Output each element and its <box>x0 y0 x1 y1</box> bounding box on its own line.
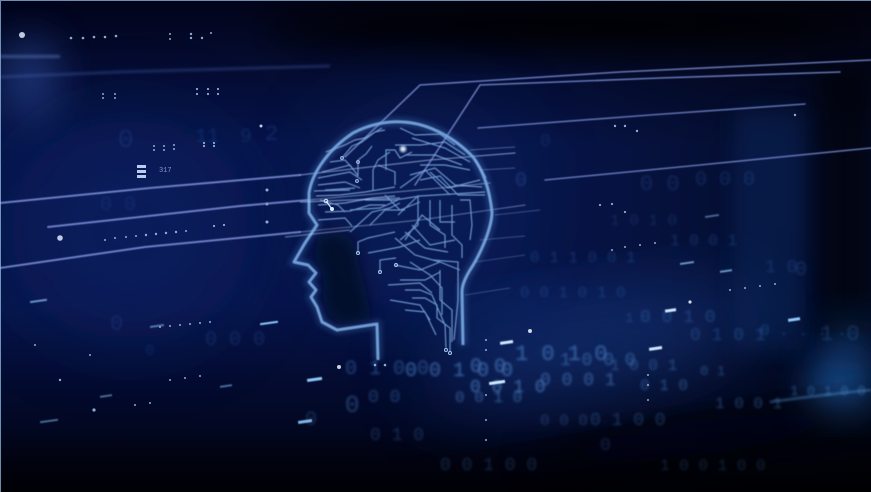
blurred binary digits: 0 <box>515 170 527 193</box>
blurred binary digits: 1 0 <box>820 322 860 347</box>
binary digit cluster: 1 0 1 0 <box>515 342 607 367</box>
binary digit cluster: 0 1 0 <box>640 377 688 395</box>
binary digit cluster: 1 0 0 0 <box>560 351 636 371</box>
small data label with bars: 317 <box>159 167 172 175</box>
binary digit cluster: 0 0 <box>368 388 400 408</box>
blurred binary digits: 0 <box>118 125 134 155</box>
binary digit cluster <box>305 342 866 476</box>
binary digit cluster: 1 0 0 1 <box>715 395 782 413</box>
blurred binary digits: 11 <box>195 126 219 149</box>
blurred binary digits: 0 0 0 <box>205 329 265 352</box>
small data label with bars <box>137 165 172 178</box>
blurred binary digits: 0 . . . . <box>760 322 846 340</box>
binary digit cluster: 0 0 1 0 <box>455 389 522 407</box>
dark face shadow <box>314 233 370 324</box>
blurred binary digits: 1 0 1 0 <box>610 212 677 230</box>
binary digit cluster: 0 <box>305 409 317 432</box>
blurred binary digits <box>100 122 860 360</box>
blurred binary digits: 0 0 1 0 1 0 <box>520 284 626 302</box>
horizontal light streaks across head <box>285 147 540 295</box>
left lens flare streaks <box>0 55 330 77</box>
data dots <box>19 32 796 441</box>
binary digit cluster: 1 0 0 1 <box>610 357 677 375</box>
binary digit cluster: 1 0 1 0 0 <box>790 384 866 400</box>
head outline glow <box>294 122 492 360</box>
binary digit cluster: 0 0 <box>470 356 506 379</box>
binary digit cluster: 0 1 0 0 <box>345 358 429 381</box>
blurred binary digits: 0 0 <box>640 172 680 197</box>
bright node highlights <box>324 146 452 354</box>
blurred binary digits: 9 <box>240 126 252 149</box>
binary digit cluster: 0 0 1 0 <box>470 378 546 398</box>
blurred binary digits: 0 0 0 <box>695 169 755 192</box>
blurred binary digits: 0 1 0 1 <box>690 326 766 346</box>
head outline <box>294 122 492 360</box>
binary digit cluster: 0 <box>600 436 611 456</box>
blurred binary digits: 0 0 <box>100 194 136 217</box>
blurred binary digits: 1 <box>625 311 633 327</box>
blurred binary digits: 0 1 1 0 0 1 <box>530 249 636 267</box>
blurred binary digits: 2 <box>265 122 278 147</box>
small bright dashes <box>30 214 800 424</box>
binary digit cluster: 0 0 1 0 0 <box>405 360 513 383</box>
blurred binary digits: 0 <box>540 132 551 152</box>
blurred binary digits: 1 0 0 1 <box>670 232 737 250</box>
blurred binary digits: 1 0 <box>765 258 797 278</box>
binary digit cluster: 0 0 1 0 0 <box>440 456 537 476</box>
binary digit cluster: 0 0 0 1 <box>540 371 616 391</box>
binary digit cluster: 0 1 0 <box>370 426 424 446</box>
bottom right light flare <box>770 390 871 402</box>
binary digit cluster: 0 <box>345 393 359 420</box>
blurred binary digits: 0 <box>795 259 807 282</box>
blurred binary digits: 0 0 1 0 <box>640 308 716 328</box>
long light beams <box>0 60 871 268</box>
binary digit cluster: 1 0 0 1 0 0 <box>660 457 766 475</box>
binary digit cluster: 0 1 0 0 <box>590 411 666 431</box>
blurred binary digits: 0 <box>145 342 155 360</box>
binary digit cluster: 0 0 0 <box>540 412 588 430</box>
circuit traces inside head <box>314 128 486 352</box>
blurred binary digits: 0 <box>110 312 123 337</box>
binary digit cluster: 0 1 <box>700 364 725 380</box>
